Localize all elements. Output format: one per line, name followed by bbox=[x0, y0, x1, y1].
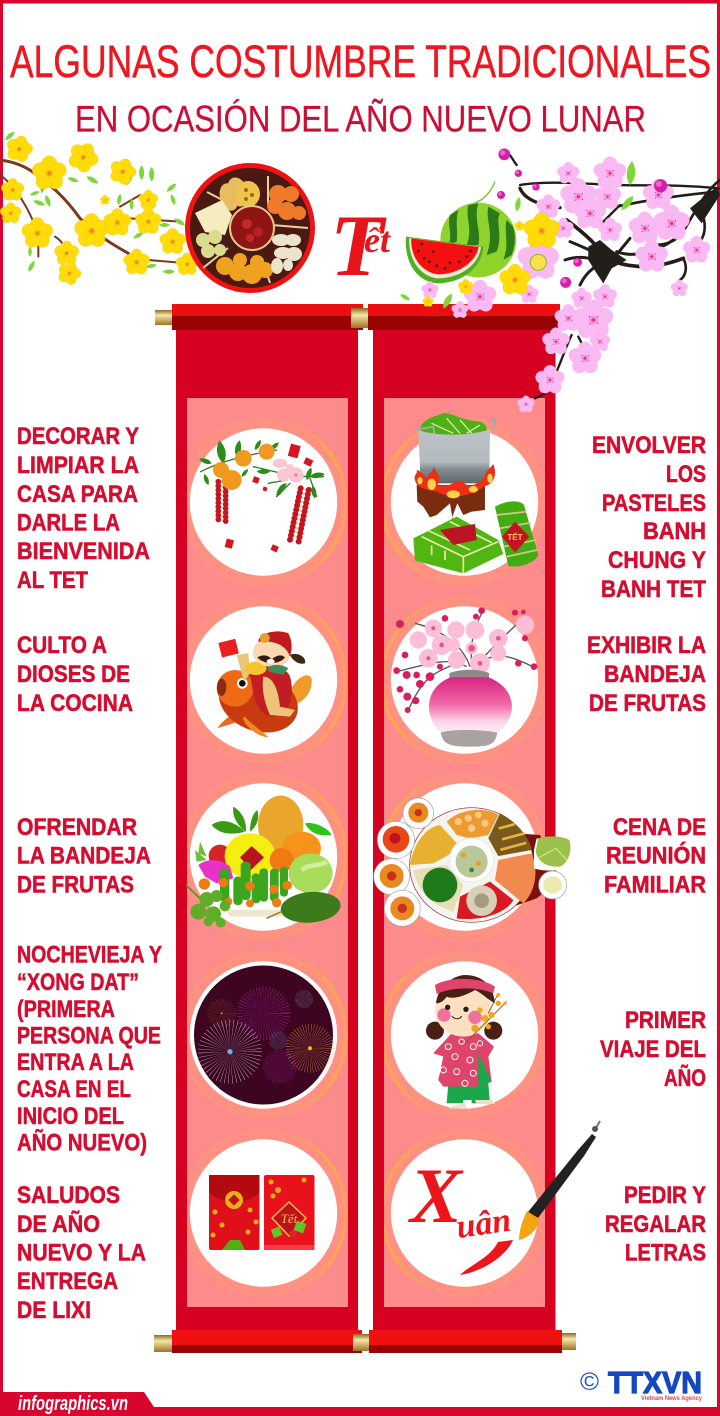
logo: TTXVN: © bbox=[580, 1368, 600, 1396]
text: exhibir bbox=[587, 632, 706, 717]
icon: god of the kitchen on carp bbox=[210, 631, 312, 743]
text: primer viaje bbox=[600, 1007, 706, 1092]
text: saludos: DE LIXI bbox=[17, 1297, 91, 1324]
icon: girl with apricot branch bbox=[426, 975, 507, 1109]
scroll right bbox=[351, 304, 560, 1335]
icon: red lucky envelopes: Tết bbox=[281, 1211, 298, 1226]
scroll left bbox=[155, 304, 363, 1335]
text: cena: REUNIÓN bbox=[606, 842, 706, 870]
text: envolver: ENVOLVER bbox=[592, 432, 706, 459]
text: nochevieja: PERSONA QUE bbox=[17, 1022, 161, 1050]
text: saludos: ENTREGA bbox=[17, 1268, 118, 1295]
logo: TTXVN bbox=[580, 1365, 703, 1402]
text: envolver bbox=[592, 432, 706, 603]
text: exhibir: EXHIBIR LA bbox=[587, 632, 706, 659]
icon: tangerine branch and firecrackers bbox=[198, 439, 325, 552]
rollers: bottom bbox=[154, 1330, 576, 1353]
text: pedir: PEDIR Y bbox=[624, 1182, 706, 1209]
text: nochevieja bbox=[17, 942, 162, 1156]
text: pedir bbox=[605, 1182, 706, 1266]
text: pedir: LETRAS bbox=[625, 1240, 706, 1266]
text: culto: LA COCINA bbox=[17, 690, 133, 717]
text: cena bbox=[604, 814, 706, 898]
icon: calligraphy and brush: X bbox=[408, 1152, 464, 1239]
text: envolver: BANH TET bbox=[601, 576, 706, 603]
text: saludos: SALUDOS bbox=[17, 1182, 120, 1209]
text: saludos: NUEVO Y LA bbox=[17, 1240, 146, 1266]
text: decorar bbox=[17, 423, 150, 594]
logo: TTXVN: Vietnam News Agency bbox=[641, 1396, 703, 1402]
text: nochevieja: “XONG DAT” bbox=[17, 969, 139, 996]
text: primer viaje: AÑO bbox=[664, 1064, 706, 1092]
text: saludos: DE AÑO bbox=[17, 1210, 100, 1238]
roller: top right bbox=[351, 304, 560, 330]
text: ofrendar: LA BANDEJA bbox=[17, 842, 151, 870]
illustration: watermelon bbox=[406, 182, 516, 283]
icon: pot with banh chung and banh tet: TẾT bbox=[507, 532, 523, 542]
icon: calligraphy and brush bbox=[408, 1121, 600, 1275]
logo: TTXVN: TTXVN bbox=[608, 1365, 702, 1400]
roller: top left bbox=[155, 304, 363, 330]
text: decorar: BIENVENIDA bbox=[17, 538, 150, 565]
text: saludos bbox=[17, 1182, 146, 1324]
text: nochevieja: INICIO DEL bbox=[17, 1103, 124, 1130]
text: decorar: DECORAR Y bbox=[17, 423, 139, 450]
text: envolver: LOS bbox=[666, 461, 706, 488]
illustration: candy tray bbox=[185, 163, 315, 293]
text: primer viaje: PRIMER bbox=[625, 1007, 706, 1034]
text: cena: CENA DE bbox=[613, 814, 706, 841]
text: nochevieja: NOCHEVIEJA Y bbox=[17, 942, 162, 968]
icon: pot with banh chung and banh tet bbox=[413, 413, 538, 573]
illustration: Tet calligraphy: ết bbox=[364, 220, 391, 260]
text: envolver: BANH bbox=[643, 518, 706, 545]
text: ofrendar bbox=[17, 814, 151, 898]
circles with rings: right column bbox=[382, 423, 544, 1292]
icon: fireworks bbox=[192, 964, 334, 1106]
text: nochevieja: AÑO NUEVO) bbox=[17, 1128, 147, 1156]
footer tab bbox=[0, 1392, 720, 1416]
icon: red lucky envelopes bbox=[209, 1175, 314, 1250]
text: culto: DIOSES DE bbox=[17, 661, 130, 688]
text: nochevieja: CASA EN EL bbox=[17, 1076, 131, 1103]
text: nochevieja: (PRIMERA bbox=[17, 996, 115, 1023]
text: decorar: CASA PARA bbox=[17, 481, 138, 508]
text: cena: FAMILIAR bbox=[604, 872, 706, 898]
circles with rings: left column bbox=[184, 423, 346, 1292]
icon: fruit tray bbox=[186, 796, 342, 928]
text: nochevieja: ENTRA A LA bbox=[17, 1049, 134, 1076]
footer tab: infographics.vn bbox=[18, 1393, 128, 1415]
text: decorar: AL TET bbox=[17, 567, 88, 594]
illustration: Tet calligraphy: T bbox=[330, 198, 387, 295]
text: culto bbox=[17, 632, 133, 717]
illustration: peach blossom branch bbox=[399, 148, 720, 414]
text: culto: CULTO A bbox=[17, 632, 107, 659]
icon: calligraphy and brush: uân bbox=[454, 1202, 513, 1246]
text: decorar: LIMPIAR LA bbox=[17, 452, 139, 479]
icon: family feast plate bbox=[374, 798, 572, 926]
text: exhibir: BANDEJA bbox=[604, 661, 706, 688]
text: ofrendar: OFRENDAR bbox=[17, 814, 137, 841]
text: ofrendar: DE FRUTAS bbox=[17, 872, 134, 898]
illustration: yellow apricot branch bbox=[0, 130, 200, 290]
text: decorar: DARLE LA bbox=[17, 510, 120, 536]
icon: vase with peach blossoms bbox=[393, 607, 537, 747]
text: envolver: CHUNG Y bbox=[608, 547, 706, 574]
